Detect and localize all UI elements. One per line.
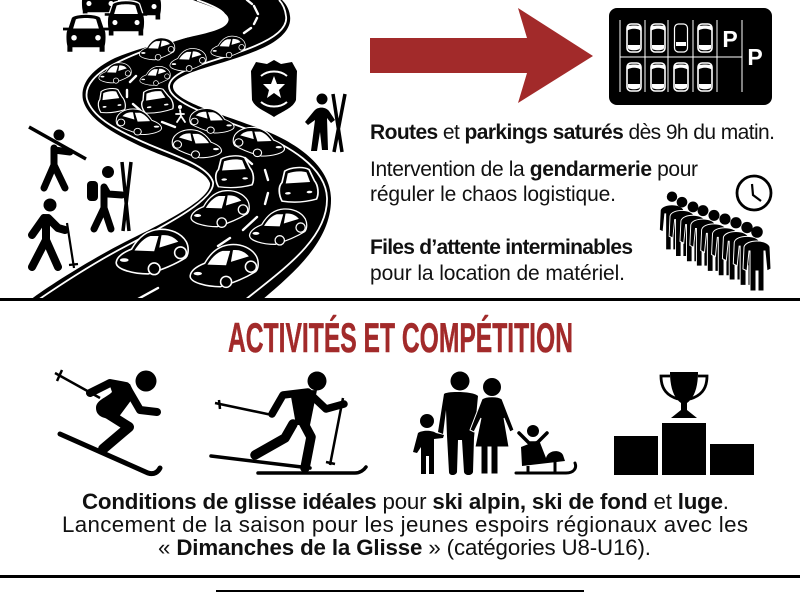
icon: person carrying skis on shoulder: [29, 127, 86, 188]
icon: police badge: [251, 60, 297, 117]
icon: walker with pole: [32, 198, 78, 268]
icon: parking: [609, 8, 772, 105]
pedestrian on road: [176, 105, 185, 122]
text: gendarmerie: réguler le chaos logistique.: [370, 183, 616, 206]
traffic cars: [96, 36, 319, 287]
road illustration: [30, 0, 331, 300]
heading: ACTIVITÉS ET COMPÉTITION: [228, 314, 573, 361]
text: files d'attente: Files d’attente interminables: [370, 236, 633, 259]
divider bottom: [0, 575, 800, 578]
queue of cars at top: [63, 0, 164, 52]
text: gendarmerie: [370, 158, 698, 206]
divider top: [0, 298, 800, 301]
icon: family with sled: [413, 372, 576, 475]
icon: parking: P: [722, 26, 738, 52]
arrow: [370, 8, 593, 103]
icon: podium and trophy: [614, 372, 754, 475]
divider short: [216, 590, 584, 592]
winding road surface: [30, 0, 331, 300]
text: files d'attente: pour la location de matériel.: [370, 262, 625, 285]
text: files d'attente: [370, 236, 633, 285]
icon: cross-country skier: [211, 372, 366, 473]
text: conditions et saison: Conditions de glisse idéales pour ski alpin, ski de fond et luge.: [82, 489, 729, 514]
text: conditions et saison: Lancement de la saison pour les jeunes espoirs régionaux avec les: [62, 512, 748, 537]
text: routes et parkings: Routes et parkings saturés dès 9h du matin.: [370, 121, 775, 144]
text: gendarmerie: Intervention de la gendarmerie pour: [370, 158, 698, 181]
text: conditions et saison: [62, 489, 748, 560]
text: conditions et saison: « Dimanches de la Glisse » (catégories U8-U16).: [158, 535, 651, 560]
icon: hiker with backpack and skis: [87, 162, 131, 231]
icon: alpine skier: [55, 370, 160, 474]
icon: queue with clock: [659, 176, 771, 291]
icon: parking: P: [747, 44, 763, 70]
icon: skier standing right: [305, 94, 345, 152]
